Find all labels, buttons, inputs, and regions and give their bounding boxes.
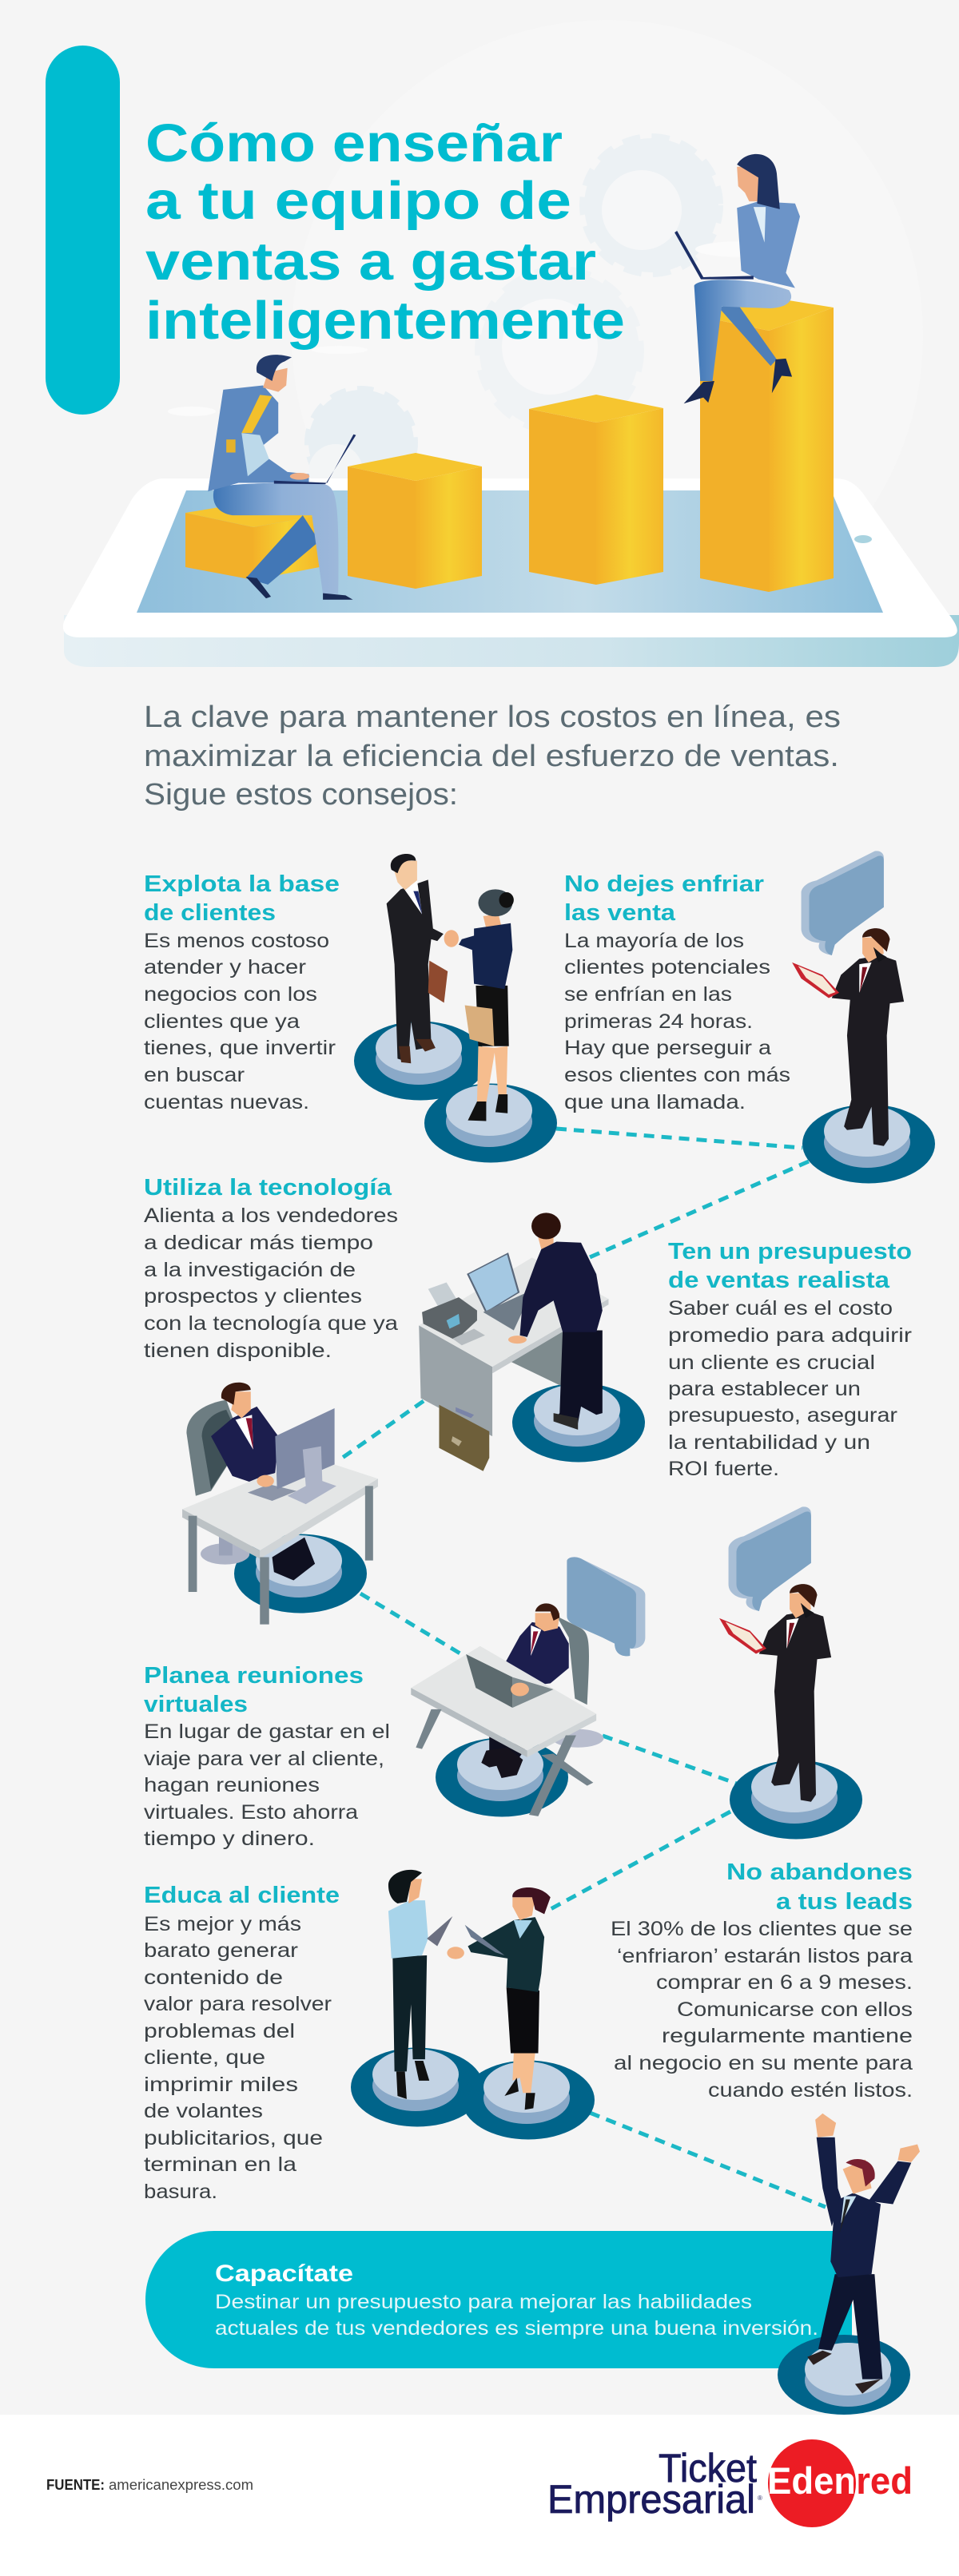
tip: Ten un presupuesto de ventas realista: Ten un presupuesto [668,1239,912,1264]
logo: Ticket Empresarial Edenred [547,2439,913,2527]
tip: Educa al cliente: de volantes [144,2100,263,2122]
tip: Utiliza la tecnología: tienen disponible. [144,1340,332,1362]
tip: No dejes enfriar las venta: que una llamada. [564,1091,746,1113]
tip: No abandones a tus leads: comprar en 6 a 9 meses. [656,1971,913,1994]
tip: No dejes enfriar las venta: clientes potenciales [564,956,770,978]
tip: No abandones a tus leads: cuando estén listos. [708,2079,913,2102]
tip: Planea reuniones virtuales: hagan reuniones [144,1774,320,1796]
tip: Planea reuniones virtuales: Planea reuniones [144,1663,364,1689]
seated woman with laptop [674,154,800,403]
tip: Utiliza la tecnología: prospectos y clientes [144,1285,362,1308]
intro text: Sigue estos consejos: [144,778,458,812]
logo: Ticket Empresarial Edenred: Edenred [767,2459,913,2502]
hero illustration [63,20,959,667]
tip: No dejes enfriar las venta: Hay que perseguir a [564,1037,771,1059]
intro text: La clave para mantener los costos en línea, es [144,701,841,734]
tip: No abandones a tus leads: ‘enfriaron’ estarán listos para [617,1945,913,1967]
bar 4 [700,297,834,592]
title: inteligentemente [145,291,625,351]
bar 2 [348,453,482,589]
tip: No abandones a tus leads: No abandones [726,1860,913,1885]
tip: Educa al cliente: publicitarios, que [144,2127,323,2149]
tip: Ten un presupuesto de ventas realista: un cliente es crucial [668,1352,875,1374]
figure: businesswoman shaking hands [459,889,514,1121]
banner: Capacítate [145,2231,852,2368]
tip: No dejes enfriar las venta: se enfrían en las [564,983,732,1006]
logo: Ticket Empresarial Edenred: Ticket [659,2446,757,2491]
tip: Planea reuniones virtuales: tiempo y dinero. [144,1828,315,1850]
tip: Explota la base de clientes [144,871,340,1113]
figure: man raising arms [807,2114,920,2394]
tip: No abandones a tus leads: El 30% de los clientes que se [611,1918,913,1940]
figure: two women with tablets [388,1870,551,2110]
tip: Ten un presupuesto de ventas realista: la rentabilidad y un [668,1431,870,1454]
logo: Ticket Empresarial Edenred: ® [758,2495,762,2502]
tip: Educa al cliente [144,1883,340,2203]
source credit: FUENTE: [46,2477,105,2493]
tip: No dejes enfriar las venta [564,871,790,1113]
tip: Planea reuniones virtuales: viaje para ver al cliente, [144,1748,384,1770]
tip: Explota la base de clientes: cuentas nuevas. [144,1091,309,1113]
tip: Educa al cliente: basura. [144,2181,217,2203]
tip: Planea reuniones virtuales: virtuales [144,1692,248,1717]
tip: Explota la base de clientes: atender y hacer [144,956,306,978]
tip: Ten un presupuesto de ventas realista [668,1239,912,1480]
tip: Planea reuniones virtuales [144,1663,390,1850]
tip: No abandones a tus leads: Comunicarse con ellos [677,1998,913,2021]
tip: Utiliza la tecnología: a la investigación de [144,1259,356,1281]
tip: Explota la base de clientes: negocios con los [144,983,317,1006]
banner text: actuales de tus vendedores es siempre una buena inversión. [215,2317,818,2340]
platform: standing desk man [512,1383,645,1462]
title: a tu equipo de [145,171,571,231]
tip: Educa al cliente: terminan en la [144,2153,296,2176]
tip: Explota la base de clientes: tienes, que invertir [144,1037,336,1059]
side pill [46,46,120,415]
tablet screen [137,490,883,613]
tip: Utiliza la tecnología: con la tecnología que ya [144,1312,398,1335]
banner text [215,2291,818,2340]
tip: No abandones a tus leads: regularmente mantiene [662,2025,913,2047]
intro text [144,701,841,812]
tip: Educa al cliente: Es mejor y más [144,1913,301,1935]
tip: Utiliza la tecnología [144,1175,398,1362]
tip: Educa al cliente: valor para resolver [144,1993,332,2015]
logo: Ticket Empresarial Edenred: Empresarial [547,2477,755,2522]
figure: man standing at desk with laptop and fax [419,1213,608,1471]
tip: Ten un presupuesto de ventas realista: para establecer un [668,1378,861,1400]
source credit: americanexpress.com [109,2477,253,2493]
seated man with laptop [208,355,356,600]
platform: handshake woman [424,1083,557,1163]
tip: Explota la base de clientes: clientes que ya [144,1010,300,1033]
tip: Explota la base de clientes: en buscar [144,1064,245,1086]
tip: Ten un presupuesto de ventas realista: ROI fuerte. [668,1458,779,1480]
tip: No dejes enfriar las venta: La mayoría de los [564,930,744,952]
figure: man at desk with monitor [182,1383,378,1625]
tip: Educa al cliente: contenido de [144,1967,283,1989]
tip: Educa al cliente: Educa al cliente [144,1883,340,1908]
tip: Educa al cliente: imprimir miles [144,2074,298,2096]
figure: man at laptop with speech bubble [411,1557,645,1816]
figure: businessman shaking hands [387,854,459,1063]
tip: Utiliza la tecnología: Utiliza la tecnología [144,1175,392,1201]
tip: No abandones a tus leads: al negocio en su mente para [614,2052,913,2074]
tablet body [63,478,957,637]
platform: phone man 2 [730,1760,862,1839]
banner heading: Capacítate [215,2260,353,2287]
tablet button [854,535,872,543]
bar 3 [529,395,663,585]
tip: Planea reuniones virtuales: virtuales. Esto ahorra [144,1801,358,1824]
tip: Explota la base de clientes: Explota la base [144,871,340,897]
tip: Utiliza la tecnología: a dedicar más tiempo [144,1232,373,1254]
tip: No abandones a tus leads: a tus leads [776,1889,913,1915]
bar 1 [185,502,320,580]
tip: Planea reuniones virtuales: En lugar de gastar en el [144,1721,390,1743]
tip: Explota la base de clientes: de clientes [144,900,276,926]
figure: man on the phone with speech bubble [792,851,904,1146]
title: Cómo enseñar [145,113,563,173]
tip: No dejes enfriar las venta: esos clientes con más [564,1064,790,1086]
connector lines [341,1129,826,2207]
platform: woman right [462,2061,595,2139]
tip: No dejes enfriar las venta: No dejes enfriar [564,871,764,897]
tip: No dejes enfriar las venta: las venta [564,900,676,926]
title [145,113,625,351]
platform: celebrating man [778,2335,910,2415]
tip: Educa al cliente: barato generar [144,1939,298,1962]
platform: handshake man [354,1021,487,1101]
intro text: maximizar la eficiencia del esfuerzo de ventas. [144,740,839,773]
tip: Educa al cliente: cliente, que [144,2046,265,2069]
tip: Ten un presupuesto de ventas realista: presupuesto, asegurar [668,1404,897,1427]
tablet base [64,615,959,667]
title: ventas a gastar [145,232,596,292]
platform: phone man [802,1104,935,1184]
banner text: Destinar un presupuesto para mejorar las habilidades [215,2291,752,2313]
tip: Ten un presupuesto de ventas realista: promedio para adquirir [668,1324,912,1347]
tip: Educa al cliente: problemas del [144,2020,295,2042]
tip: Ten un presupuesto de ventas realista: Saber cuál es el costo [668,1297,893,1320]
tip: Utiliza la tecnología: Alienta a los vendedores [144,1205,398,1227]
tip: Explota la base de clientes: Es menos costoso [144,930,329,952]
platform: seated desk man [234,1534,367,1613]
source credit [46,2477,253,2493]
footer background [0,2415,959,2576]
tip: No dejes enfriar las venta: primeras 24 horas. [564,1010,753,1033]
platform: woman left [351,2048,483,2126]
tip: Ten un presupuesto de ventas realista: de ventas realista [668,1268,890,1293]
figure: second man on the phone with speech bubble [719,1506,831,1802]
tip: No abandones a tus leads [611,1860,913,2102]
platform: virtual meeting man [436,1738,568,1816]
background gears [168,20,923,651]
